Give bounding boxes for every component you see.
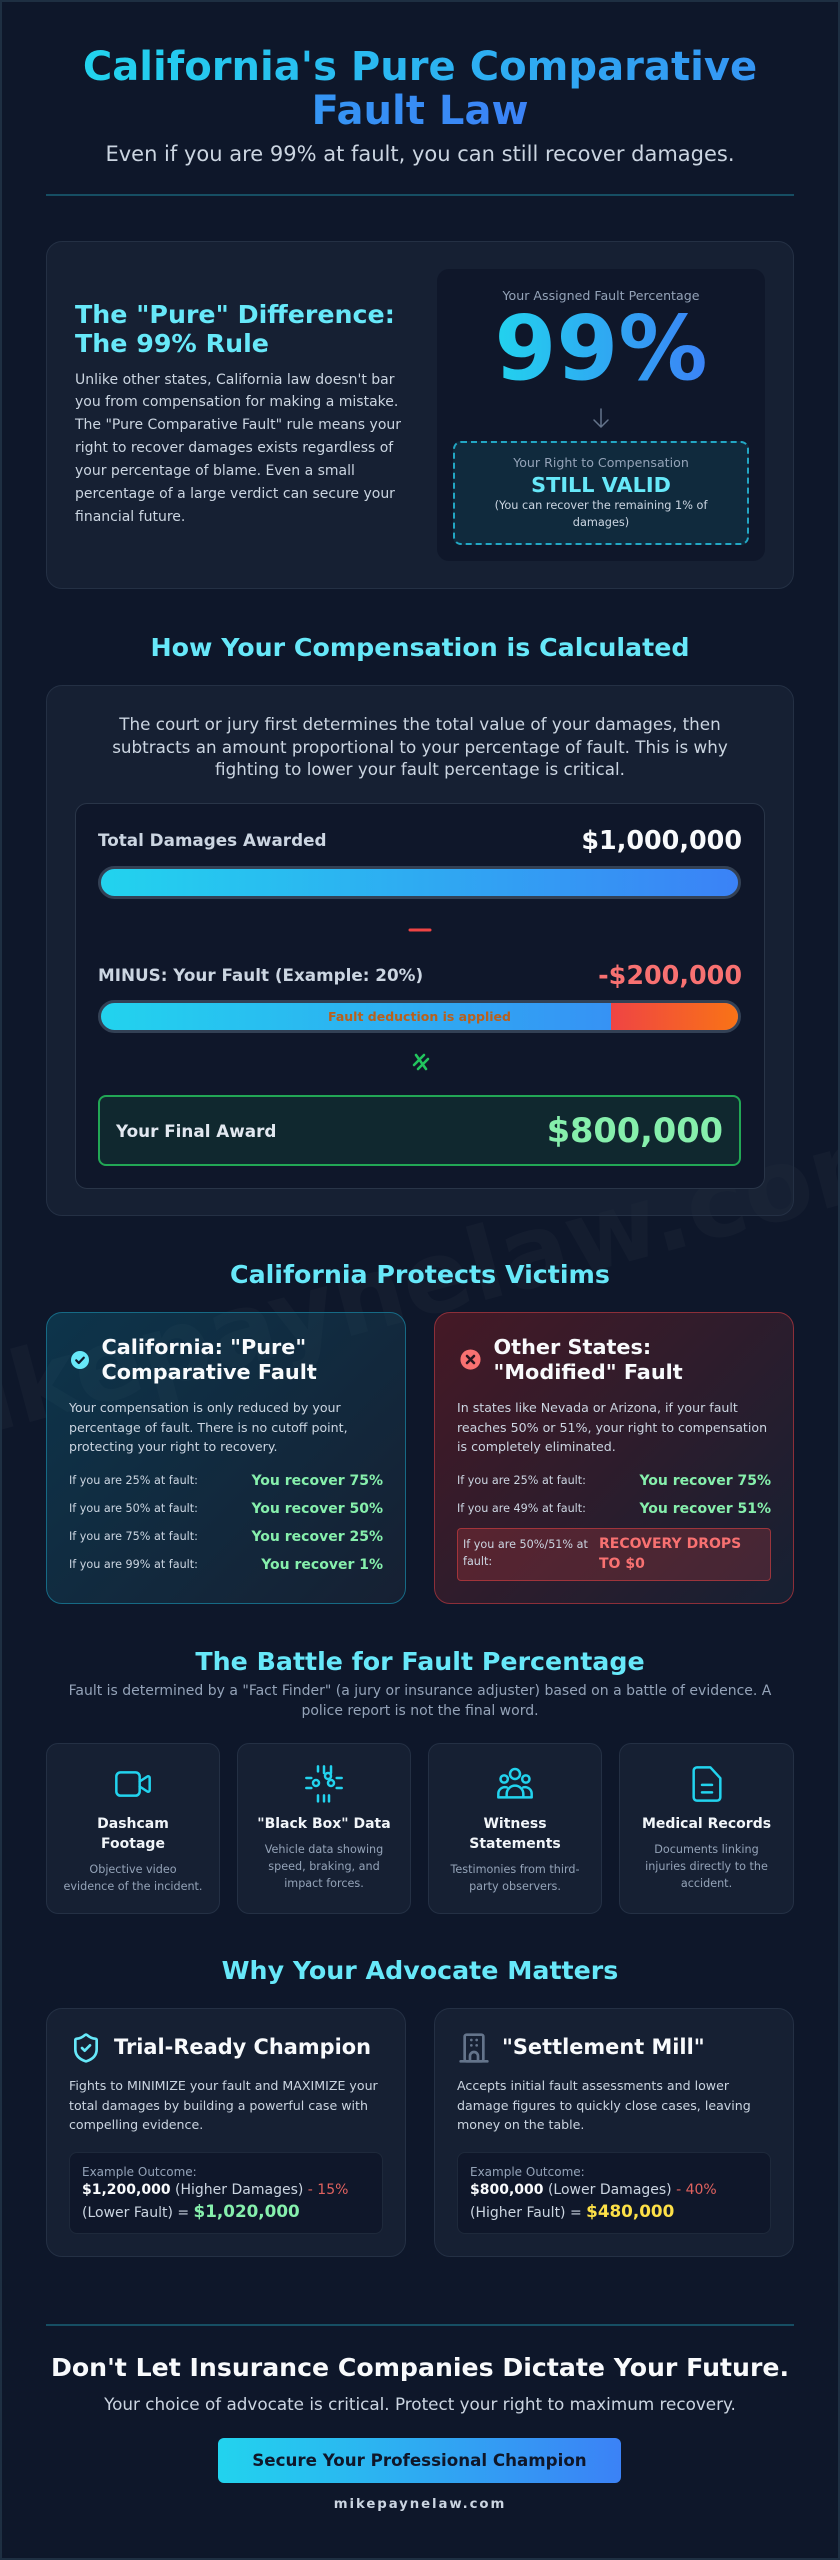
box: trial-ready example outcome: $1,200,000 (Higher Damages) - 15%	[82, 2182, 348, 2198]
text: trial-ready: compelling evidence.	[69, 2117, 203, 2132]
text: calculation explanation: fighting to lower your fault percentage is critical.	[215, 759, 625, 779]
label: 50/51 percent: If you are 50%/51% at	[463, 1538, 588, 1551]
panel: settlement mill	[434, 2008, 794, 2257]
text: black box: speed, braking, and	[268, 1860, 380, 1873]
value: fault deduction: -$200,000	[598, 960, 742, 990]
panel: other states modified: If you are 49% at fault:	[457, 1502, 586, 1515]
card: dashcam footage	[46, 1743, 220, 1914]
text: california explanation: protecting your right to recovery.	[69, 1439, 278, 1454]
panel: california pure	[46, 1312, 406, 1604]
text: california explanation: percentage of fault. There is no cutoff point,	[69, 1420, 348, 1435]
panel: other states modified: If you are 25% at fault:	[457, 1474, 586, 1487]
footer: website: mikepaynelaw.com	[334, 2497, 506, 2512]
panel: california pure: You recover 75%	[251, 1473, 383, 1489]
panel: calculation chart	[75, 803, 765, 1189]
text: settlement mill: damage figures to quickly close cases, leaving	[457, 2098, 751, 2113]
panel: other states modified: You recover 75%	[639, 1473, 771, 1489]
value: total damages: $1,000,000	[581, 825, 742, 855]
label: your fault: MINUS: Your Fault (Example: 20%)	[98, 965, 423, 985]
button: secure champion: Secure Your Professional Champion	[252, 2450, 587, 2470]
text: witness: Testimonies from third-	[450, 1863, 580, 1876]
label: final award: Your Final Award	[116, 1121, 276, 1141]
text: other states explanation: is completely eliminated.	[457, 1439, 616, 1454]
text: trial-ready: total damages by building a powerful case with	[69, 2098, 368, 2113]
label: total damages: Total Damages Awarded	[98, 830, 326, 850]
row: 99 percent	[69, 1557, 383, 1573]
heading: why your advocate matters: Why Your Advocate Matters	[222, 1956, 618, 1985]
heading: california: Comparative Fault	[102, 1360, 317, 1384]
text: other states explanation: reaches 50% or 51%, your right to compensation	[457, 1420, 767, 1435]
box: trial-ready example outcome: Example Outcome:	[82, 2165, 197, 2179]
callout: right to compensation	[453, 441, 749, 545]
text: black box: Vehicle data showing	[265, 1843, 383, 1856]
panel: california pure: You recover 50%	[251, 1501, 383, 1517]
label: dashcam: Dashcam	[97, 1816, 169, 1832]
label: right to compensation: Your Right to Compensation	[513, 455, 689, 470]
subtitle: Even if you are 99% at fault, you can still recover damages.	[105, 142, 735, 166]
row: 49 percent	[457, 1501, 771, 1517]
text: settlement mill	[457, 2078, 751, 2132]
stat: 99 percent: 99%	[494, 296, 708, 400]
note: remaining damages: (You can recover the remaining 1% of	[495, 499, 707, 512]
text: settlement mill: money on the table.	[457, 2117, 584, 2132]
box: settlement mill example outcome	[457, 2152, 771, 2234]
row: 75 percent	[69, 1529, 383, 1545]
label: fault deduction note: Fault deduction is applied	[328, 1009, 511, 1024]
note: remaining damages: damages)	[573, 516, 629, 529]
heading: trial-ready: Trial-Ready Champion	[114, 2035, 371, 2059]
value: recovery drops: RECOVERY DROPS	[599, 1536, 741, 1552]
panel: california pure: If you are 25% at fault:	[69, 1474, 198, 1487]
panel: other states modified	[434, 1312, 794, 1604]
panel: california pure: If you are 99% at fault:	[69, 1558, 198, 1571]
card: witness statements	[428, 1743, 602, 1914]
heading: pure difference: The "Pure" Difference:	[75, 300, 395, 329]
text: pure difference explanation	[74, 372, 401, 525]
note: remaining damages	[495, 499, 708, 529]
label: dashcam: Footage	[101, 1836, 165, 1852]
text: witness: party observers.	[469, 1880, 561, 1893]
heading: settlement mill: "Settlement Mill"	[502, 2035, 705, 2059]
text: medical: Documents linking	[654, 1843, 759, 1856]
row: recovery drops	[457, 1528, 771, 1581]
heading: california	[102, 1335, 317, 1384]
text: battle explanation: Fault is determined by a "Fact Finder" (a jury or insurance adjuster) based on a battle of evidence. A	[69, 1683, 771, 1699]
text: california explanation	[69, 1400, 348, 1454]
icon: video camera	[115, 1771, 151, 1797]
label: 50/51 percent: fault:	[463, 1555, 492, 1568]
text: medical: accident.	[681, 1877, 732, 1890]
text: pure difference explanation: Unlike other states, California law doesn't bar	[75, 372, 395, 388]
bar: fault deduction	[98, 1000, 741, 1033]
icon: witnesses	[497, 1768, 533, 1799]
value: recovery drops: TO $0	[599, 1556, 645, 1572]
text: black box: impact forces.	[284, 1877, 364, 1890]
label: witness: Statements	[469, 1836, 561, 1852]
text: pure difference explanation: financial future.	[75, 509, 185, 525]
text: medical	[645, 1843, 768, 1890]
box: settlement mill example outcome: Example Outcome:	[470, 2165, 585, 2179]
text: calculation explanation: subtracts an amount proportional to your percentage of fault. This is why	[112, 736, 728, 756]
text: trial-ready	[69, 2078, 378, 2132]
text: calculation explanation	[112, 714, 728, 779]
text: trial-ready: Fights to MINIMIZE your fault and MAXIMIZE your	[69, 2078, 378, 2093]
value: still valid: STILL VALID	[531, 473, 671, 497]
icon: arrow down	[593, 408, 609, 428]
icon: equals crossed	[412, 1054, 430, 1070]
text: witness	[450, 1863, 580, 1893]
bar: total damages	[98, 866, 741, 899]
card: black box data	[237, 1743, 411, 1914]
row: 25 percent	[457, 1473, 771, 1489]
label: black box: "Black Box" Data	[257, 1816, 391, 1832]
row: 25 percent	[69, 1473, 383, 1489]
text: pure difference explanation: you from compensation for making a mistake.	[75, 394, 398, 410]
label: dashcam	[97, 1816, 169, 1852]
panel: fault percentage	[437, 269, 765, 561]
text: settlement mill: Accepts initial fault assessments and lower	[457, 2078, 729, 2093]
text: california explanation: Your compensation is only reduced by your	[69, 1400, 341, 1415]
heading: other states: "Modified" Fault	[494, 1360, 683, 1384]
panel: california pure: If you are 50% at fault:	[69, 1502, 198, 1515]
icon: shield check	[74, 2033, 98, 2063]
icon: minus	[408, 928, 432, 932]
panel: california pure: If you are 75% at fault:	[69, 1530, 198, 1543]
text: dashcam	[63, 1863, 202, 1893]
text: calculation explanation: The court or jury first determines the total value of your damages, then	[119, 714, 721, 734]
text: other states explanation: In states like Nevada or Arizona, if your fault	[457, 1400, 738, 1415]
text: dashcam: Objective video	[89, 1863, 177, 1876]
text: pure difference explanation: percentage of a large verdict can secure your	[75, 486, 395, 502]
icon: document	[692, 1766, 722, 1802]
panel: final award	[98, 1095, 741, 1166]
label: witness	[469, 1816, 561, 1852]
icon: check circle	[71, 1351, 89, 1369]
label: assigned fault: Your Assigned Fault Percentage	[503, 288, 699, 303]
box: settlement mill example outcome: $800,000 (Lower Damages) - 40%	[470, 2182, 717, 2198]
box: trial-ready example outcome: (Lower Fault) = $1,020,000	[82, 2201, 300, 2221]
heading: other states: Other States:	[494, 1335, 651, 1359]
title: California's Pure Comparative Fault Law	[83, 44, 757, 134]
panel: trial-ready champion	[46, 2008, 406, 2257]
text: call to action: Your choice of advocate is critical. Protect your right to maximum recovery.	[104, 2394, 736, 2414]
label: witness: Witness	[483, 1816, 547, 1832]
value: final award: $800,000	[547, 1111, 723, 1150]
icon: building	[459, 2033, 489, 2063]
heading: battle for fault percentage: The Battle for Fault Percentage	[195, 1647, 645, 1676]
label: medical: Medical Records	[642, 1816, 771, 1832]
heading: california: California: "Pure"	[102, 1335, 306, 1359]
button: secure champion	[218, 2438, 621, 2483]
text: other states explanation	[457, 1400, 767, 1454]
panel: calculation	[46, 685, 794, 1216]
icon: x circle	[460, 1350, 481, 1370]
text: pure difference explanation: your percentage of blame. Even a small	[75, 463, 355, 479]
heading: california protects victims: California Protects Victims	[230, 1260, 610, 1289]
text: dashcam: evidence of the incident.	[63, 1880, 202, 1893]
heading: call to action: Don't Let Insurance Companies Dictate Your Future.	[51, 2353, 789, 2382]
card: medical records	[619, 1743, 794, 1914]
text: black box	[264, 1843, 383, 1890]
heading: other states	[494, 1335, 683, 1384]
text: battle explanation	[69, 1683, 772, 1719]
box: settlement mill example outcome: (Higher Fault) = $480,000	[470, 2201, 674, 2221]
box: trial-ready example outcome	[69, 2152, 383, 2234]
text: medical: injuries directly to the	[645, 1860, 768, 1873]
value: recovery drops	[599, 1536, 741, 1572]
label: 50/51 percent	[463, 1538, 588, 1568]
row: 50 percent	[69, 1501, 383, 1517]
heading: pure difference	[75, 300, 395, 358]
text: pure difference explanation: The "Pure Comparative Fault" rule means your	[75, 417, 401, 433]
heading: how compensation is calculated: How Your Compensation is Calculated	[150, 633, 690, 662]
icon: black box chip	[305, 1765, 343, 1803]
text: battle explanation: police report is not the final word.	[301, 1703, 539, 1719]
panel: california pure: You recover 25%	[251, 1529, 383, 1545]
text: pure difference explanation: right to recover damages exists regardless of	[75, 440, 393, 456]
panel: other states modified: You recover 51%	[639, 1501, 771, 1517]
heading: pure difference: The 99% Rule	[75, 329, 269, 358]
panel: california pure: You recover 1%	[261, 1557, 383, 1573]
panel: the pure difference	[46, 241, 794, 589]
